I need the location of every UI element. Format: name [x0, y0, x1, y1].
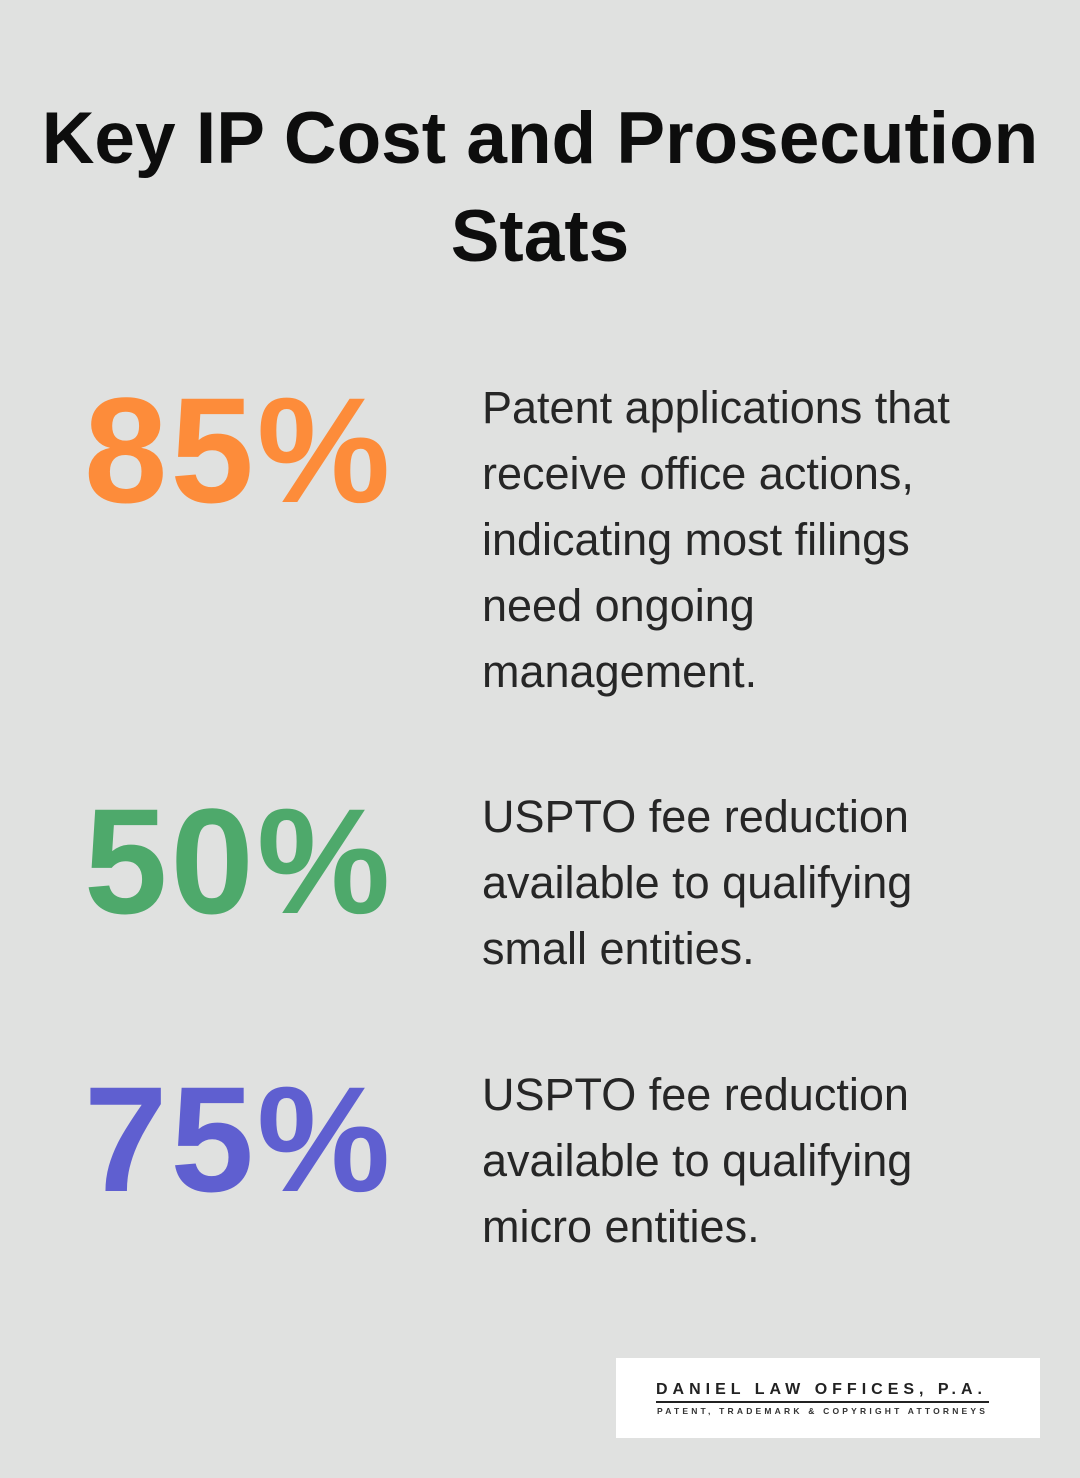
text: 50% description: available to qualifying [482, 857, 912, 908]
logo: PATENT, TRADEMARK & COPYRIGHT ATTORNEYS [657, 1406, 988, 1416]
text: 50% description [482, 791, 912, 974]
text: 85% description [482, 382, 950, 697]
stat: 85%: 85% [84, 366, 393, 534]
title [42, 98, 1038, 277]
text: 85% description: indicating most filings [482, 514, 910, 565]
text: 50% description: USPTO fee reduction [482, 791, 909, 842]
stat: 75%: 75% [84, 1055, 393, 1223]
text: 85% description: Patent applications that [482, 382, 950, 433]
text: 75% description: USPTO fee reduction [482, 1069, 909, 1120]
text: 75% description: available to qualifying [482, 1135, 912, 1186]
logo [616, 1358, 1040, 1438]
text: 85% description: receive office actions, [482, 448, 914, 499]
text: 75% description: micro entities. [482, 1201, 760, 1252]
text: 50% description: small entities. [482, 923, 755, 974]
text: 85% description: need ongoing [482, 580, 755, 631]
title: Key IP Cost and Prosecution [42, 98, 1038, 179]
logo: DANIEL LAW OFFICES, P.A. [656, 1381, 987, 1398]
text: 75% description [482, 1069, 912, 1252]
title: Stats [451, 196, 629, 277]
stat: 50%: 50% [84, 777, 393, 945]
text: 85% description: management. [482, 646, 757, 697]
